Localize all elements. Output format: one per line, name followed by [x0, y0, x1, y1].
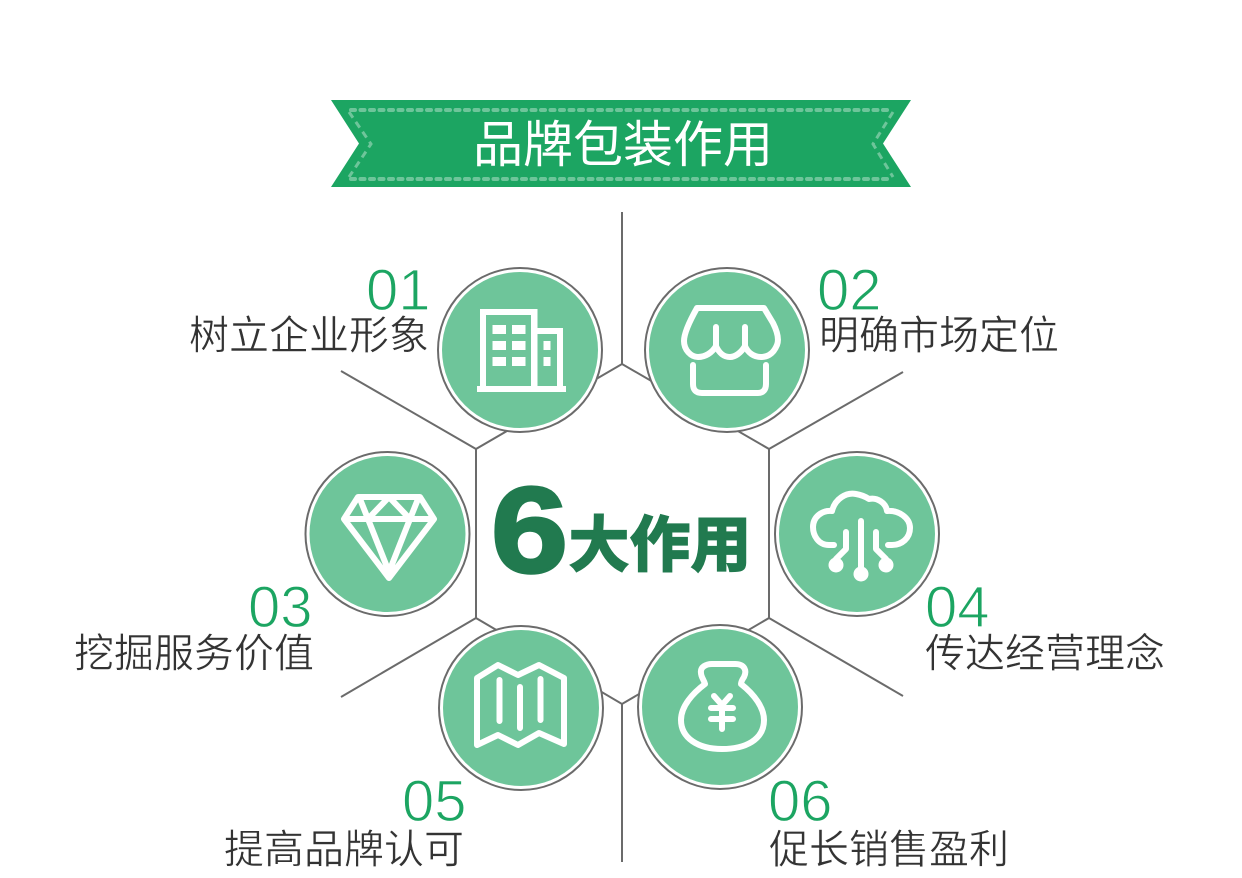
item 05: number and label — [224, 769, 467, 872]
item 04: number and label: 传达经营理念 — [925, 632, 1165, 676]
center heading: 6大作用: 大作用 — [569, 512, 751, 579]
item 04: number and label — [925, 575, 1165, 676]
item 06: number and label: 促长销售盈利 — [769, 828, 1009, 872]
item 04: cloud network icon circle — [775, 452, 939, 616]
item 03: diamond icon circle — [306, 452, 470, 616]
banner: title ribbon — [331, 100, 911, 187]
item 05: map icon circle — [439, 626, 603, 790]
item 01: number and label: 树立企业形象 — [189, 314, 429, 358]
center heading: 6大作用 — [491, 462, 751, 598]
banner: title ribbon: 品牌包装作用 — [473, 117, 773, 173]
center heading: 6大作用: 6 — [491, 462, 568, 598]
item 03: number and label: 03 — [248, 575, 313, 640]
item 04: number and label: 04 — [925, 575, 990, 640]
item 02: store icon circle — [645, 268, 809, 432]
item 02: number and label — [817, 258, 1059, 358]
item 01: building icon circle — [438, 268, 602, 432]
hexagon frame with spokes — [341, 212, 903, 862]
item 03: number and label — [74, 575, 314, 676]
item 05: number and label: 提高品牌认可 — [224, 828, 464, 872]
item 01: number and label — [189, 258, 431, 358]
item 06: number and label: 06 — [768, 769, 833, 834]
item 05: number and label: 05 — [402, 769, 467, 834]
item 02: number and label: 明确市场定位 — [819, 314, 1059, 358]
item 06: number and label — [768, 769, 1009, 872]
item 01: number and label: 01 — [366, 258, 431, 323]
item 03: number and label: 挖掘服务价值 — [74, 632, 314, 676]
item 06: money bag icon circle — [638, 625, 802, 789]
item 02: number and label: 02 — [817, 258, 882, 323]
